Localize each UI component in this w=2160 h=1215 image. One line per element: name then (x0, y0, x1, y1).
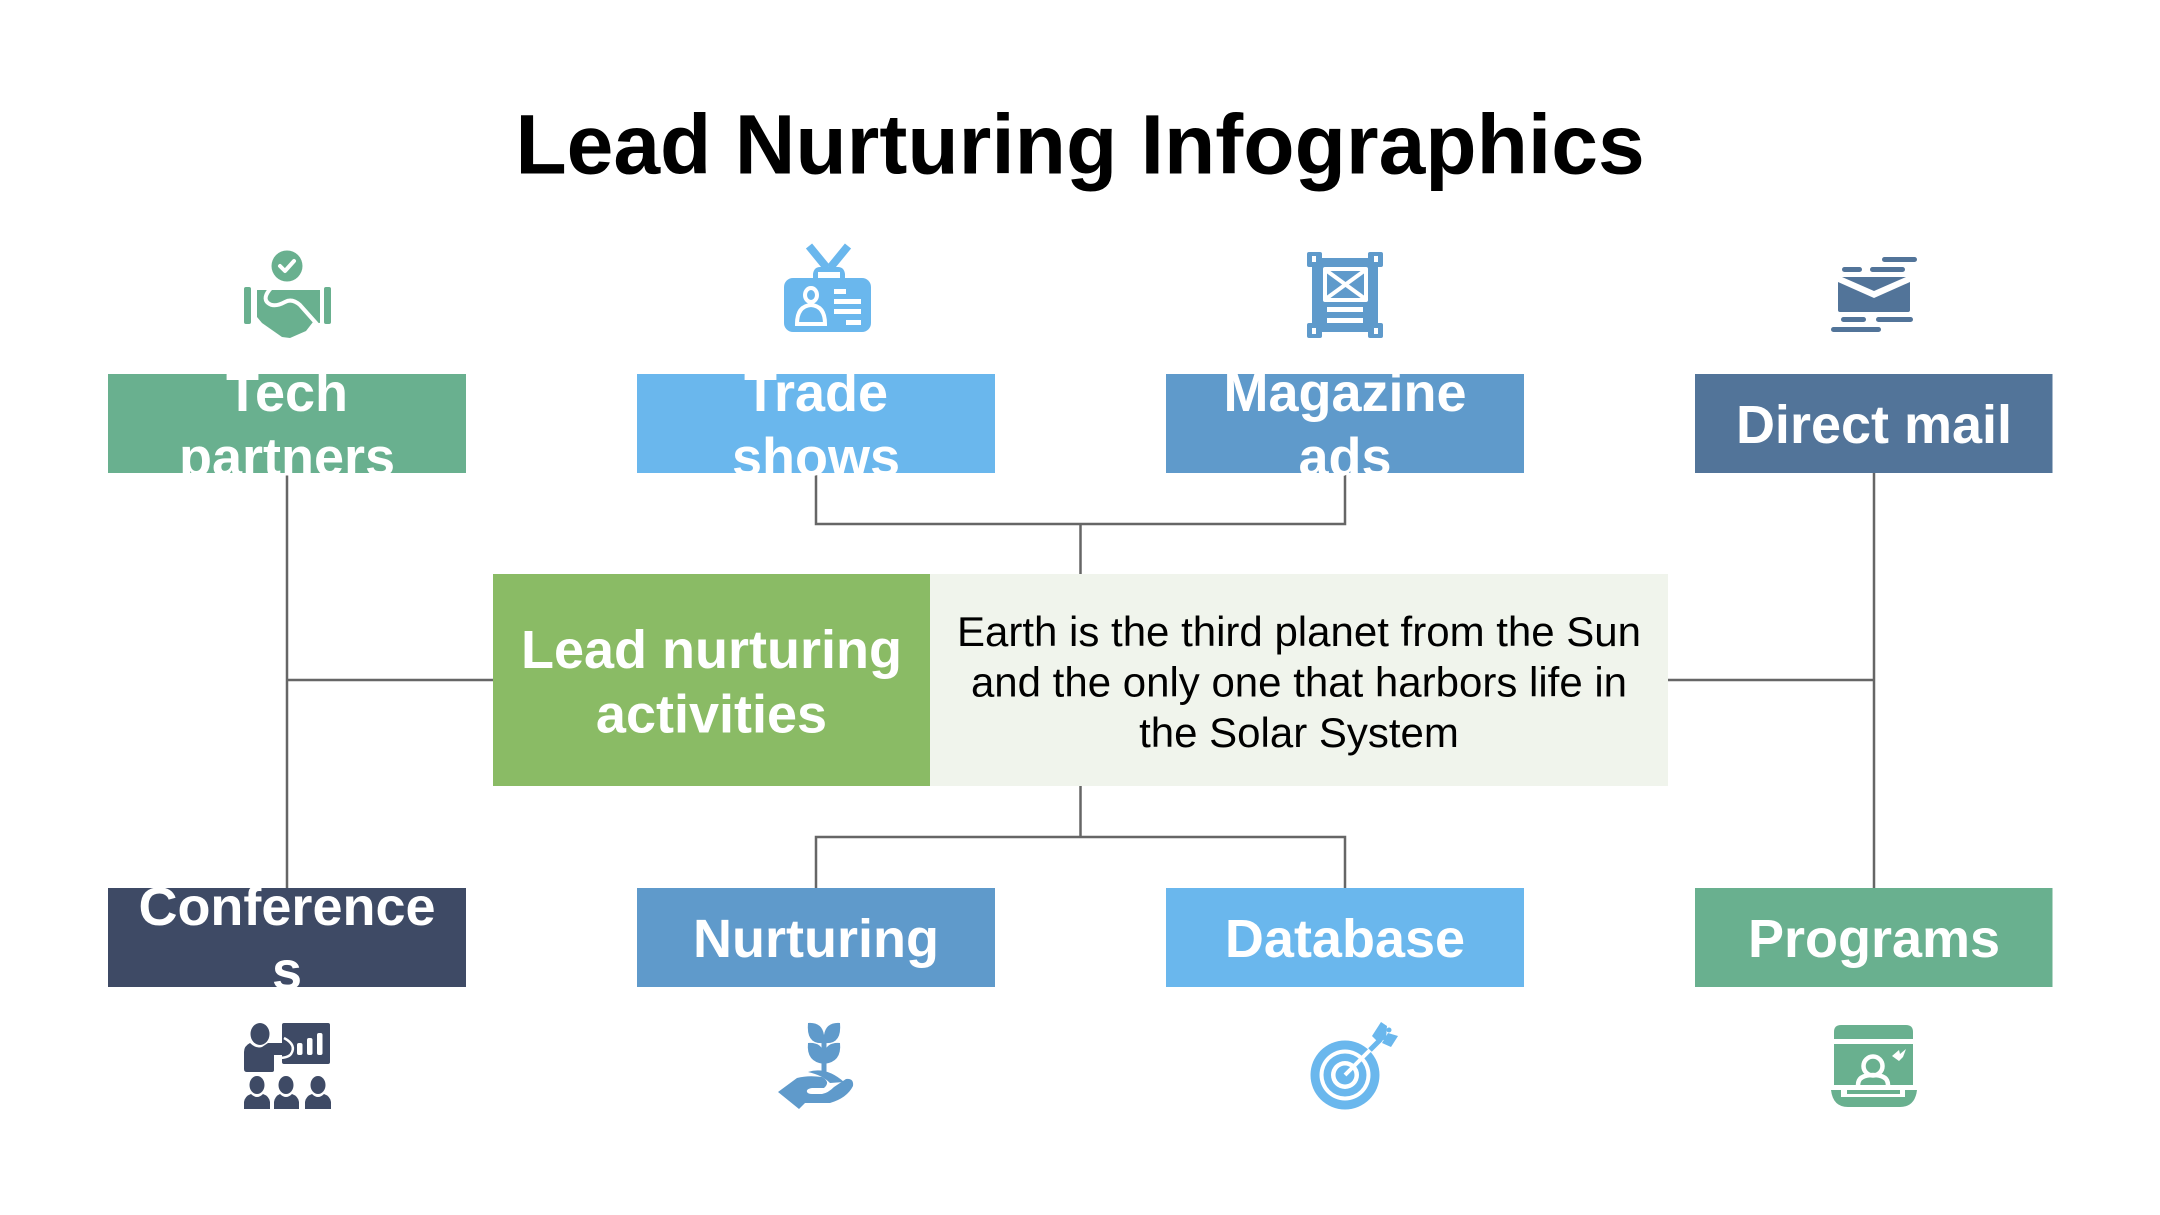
icon: direct mail (1831, 257, 1917, 332)
box: Conferences: s (272, 941, 302, 1001)
box: Direct mail (1695, 374, 2052, 473)
box: Magazine ads: ads (1298, 428, 1392, 488)
box: Conferences: Conference (138, 877, 436, 937)
central description panel: the Solar System (1139, 709, 1459, 756)
box: Database (1166, 888, 1524, 987)
box: Trade shows: shows (732, 428, 900, 488)
connector lines (287, 473, 1874, 888)
central description panel (930, 574, 1668, 786)
icon: handshake (244, 250, 331, 338)
box: Trade shows (637, 363, 995, 488)
icon: magazine wireframe (1307, 252, 1383, 338)
box: Tech partners (108, 363, 466, 488)
box: Database: Database (1225, 909, 1465, 969)
icon: badge (784, 246, 871, 332)
icon: plant in hand (778, 1023, 853, 1109)
central description panel: Earth is the third planet from the Sun (957, 608, 1641, 655)
central description panel: and the only one that harbors life in (971, 658, 1627, 706)
box: Magazine ads: Magazine (1223, 363, 1467, 423)
icon: online program laptop (1831, 1025, 1917, 1107)
central heading panel: activities (596, 684, 827, 744)
box: Nurturing: Nurturing (693, 909, 939, 969)
box: Magazine ads (1166, 363, 1524, 488)
box: Conferences (108, 877, 466, 1001)
title: Lead Nurturing Infographics (515, 98, 1645, 192)
central heading panel (493, 574, 930, 786)
box: Nurturing (637, 888, 995, 987)
central heading panel: Lead nurturing (521, 620, 902, 680)
icon: target with dart (1310, 1022, 1398, 1110)
box: Tech partners: Tech (226, 363, 348, 423)
box: Tech partners: partners (179, 428, 395, 488)
box: Direct mail: Direct mail (1736, 395, 2012, 455)
box: Programs (1695, 888, 2052, 987)
box: Trade shows: Trade (744, 363, 888, 423)
icon: conference presenter (244, 1023, 331, 1109)
box: Programs: Programs (1748, 909, 2000, 969)
